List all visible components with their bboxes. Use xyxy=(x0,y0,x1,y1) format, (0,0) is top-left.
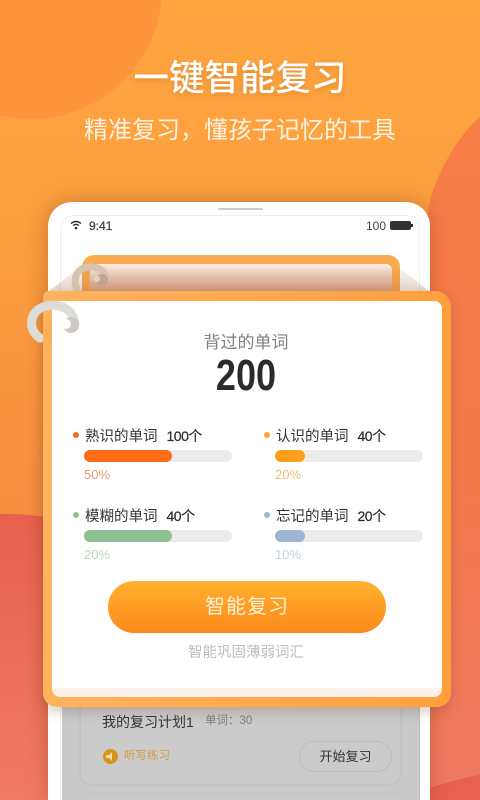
start review button: 开始复习 xyxy=(319,749,372,764)
status bar: battery icon xyxy=(390,221,413,230)
ring binder xyxy=(27,300,80,342)
button caption: 智能巩固薄弱词汇 xyxy=(188,645,304,661)
plan title: 我的复习计划1 xyxy=(102,714,194,730)
plan word count: 单词：30 xyxy=(205,715,252,727)
back card inner xyxy=(90,264,392,295)
label: 认识的单词 40个 xyxy=(276,428,386,445)
smart review button: 智能复习 xyxy=(205,596,289,618)
status bar: battery level: 100 xyxy=(366,219,386,233)
title: 一键智能复习 xyxy=(133,58,346,98)
stat: familiar words xyxy=(73,428,232,482)
percent: 50% xyxy=(84,467,110,482)
progress bar xyxy=(275,450,423,462)
next plan card xyxy=(81,797,400,800)
percent: 10% xyxy=(275,547,301,562)
dot xyxy=(264,432,270,438)
start review button xyxy=(299,741,392,772)
label: 熟识的单词 100个 xyxy=(85,428,202,445)
review plan card xyxy=(81,695,400,784)
status bar: time: 9:41 xyxy=(89,219,112,233)
heading: words reviewed: 背过的单词 xyxy=(204,333,288,352)
total count: 200 xyxy=(216,351,276,400)
dot xyxy=(264,512,270,518)
back card ring xyxy=(72,263,110,291)
dot xyxy=(73,512,79,518)
stat: vague words xyxy=(73,508,232,562)
label: 模糊的单词 40个 xyxy=(85,508,195,525)
main card white panel xyxy=(52,301,442,697)
subtitle: 精准复习，懂孩子记忆的工具 xyxy=(84,117,396,144)
dictation label: 听写练习 xyxy=(124,750,170,762)
dimmed list area xyxy=(62,700,420,800)
phone notch handle xyxy=(218,208,263,210)
phone frame xyxy=(48,202,430,800)
stat: forgotten words xyxy=(264,508,423,562)
shade over phone top xyxy=(50,268,428,291)
status bar: wifi icon xyxy=(70,220,82,230)
dot xyxy=(73,432,79,438)
icon: speaker xyxy=(103,749,118,764)
progress bar xyxy=(275,530,423,542)
label: 忘记的单词 20个 xyxy=(276,508,386,525)
progress bar xyxy=(84,450,232,462)
percent: 20% xyxy=(275,467,301,482)
percent: 20% xyxy=(84,547,110,562)
stat: known words xyxy=(264,428,423,482)
smart review button xyxy=(108,581,386,633)
main card xyxy=(43,291,451,707)
back card xyxy=(82,255,400,295)
phone screen xyxy=(60,215,420,800)
progress bar xyxy=(84,530,232,542)
